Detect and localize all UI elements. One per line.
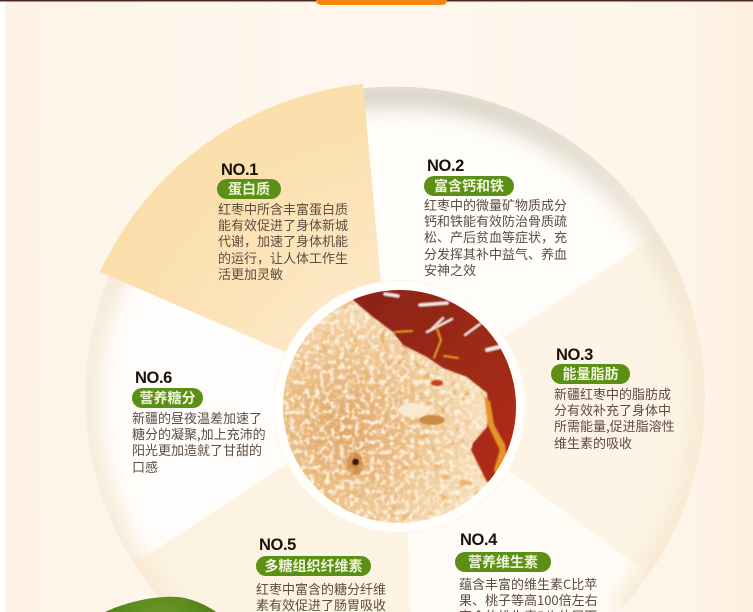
item NO.2 calcium and iron: 富含钙和铁 bbox=[434, 176, 504, 196]
item NO.6 sugars: 营养糖分 bbox=[140, 388, 196, 408]
item NO.6 sugars: 口感 bbox=[132, 457, 158, 476]
item NO.6 sugars bbox=[132, 369, 266, 476]
item NO.3 energy fat: NO.3 bbox=[556, 346, 593, 364]
orange wedge for NO.1 bbox=[100, 84, 382, 352]
item NO.3 energy fat: 能量脂肪 bbox=[562, 364, 618, 384]
item NO.3 energy fat: 新疆红枣中的脂肪成 bbox=[554, 384, 671, 403]
item NO.3 energy fat bbox=[551, 346, 675, 452]
item NO.2 calcium and iron: 安神之效 bbox=[424, 260, 476, 279]
item NO.2 calcium and iron: 钙和铁能有效防治骨质疏 bbox=[424, 211, 567, 230]
item NO.1 protein: 能有效促进了身体新城 bbox=[218, 215, 348, 234]
item NO.6 sugars: NO.6 bbox=[135, 369, 172, 387]
item NO.1 protein: 的运行，让人体工作生 bbox=[218, 248, 348, 267]
item NO.1 protein: 代谢，加速了身体机能 bbox=[218, 231, 348, 250]
item NO.2 calcium and iron: 分发挥其补中益气、养血 bbox=[424, 244, 567, 263]
item NO.1 protein: NO.1 bbox=[221, 161, 258, 179]
top orange tab bbox=[316, 0, 447, 5]
item NO.1 protein bbox=[217, 161, 348, 283]
item NO.4 vitamins: 营养维生素 bbox=[468, 552, 538, 572]
item NO.3 energy fat: 所需能量,促进脂溶性 bbox=[554, 416, 675, 435]
item NO.1 protein: 红枣中所含丰富蛋白质 bbox=[218, 199, 348, 218]
wheel sectors bbox=[85, 86, 705, 612]
item NO.1 protein: 蛋白质 bbox=[228, 179, 270, 199]
item NO.5 fibre bbox=[256, 537, 386, 612]
item NO.6 sugars: 糖分的凝聚,加上充沛的 bbox=[132, 424, 266, 443]
item NO.2 calcium and iron: 松、产后贫血等症状，充 bbox=[424, 227, 567, 246]
bottom green leaf bbox=[105, 597, 216, 612]
item NO.1 protein: 活更加灵敏 bbox=[218, 264, 283, 283]
item NO.2 calcium and iron: 红枣中的微量矿物质成分 bbox=[424, 195, 567, 214]
item NO.3 energy fat: 分有效补充了身体中 bbox=[554, 400, 671, 419]
item NO.2 calcium and iron bbox=[424, 157, 567, 279]
item NO.6 sugars: 阳光更加造就了甘甜的 bbox=[132, 440, 262, 459]
item NO.4 vitamins: NO.4 bbox=[460, 531, 497, 549]
item NO.6 sugars: 新疆的昼夜温差加速了 bbox=[132, 408, 262, 427]
item NO.3 energy fat: 维生素的吸收 bbox=[554, 433, 632, 452]
item NO.2 calcium and iron: NO.2 bbox=[427, 157, 464, 175]
item NO.4 vitamins: 果、桃子等高100倍左右 bbox=[459, 590, 598, 609]
item NO.5 fibre: 多糖组织纤维素 bbox=[264, 556, 362, 576]
item NO.4 vitamins bbox=[455, 531, 598, 612]
centre photo: date slice bbox=[280, 288, 520, 526]
centre white ring bbox=[274, 280, 526, 532]
